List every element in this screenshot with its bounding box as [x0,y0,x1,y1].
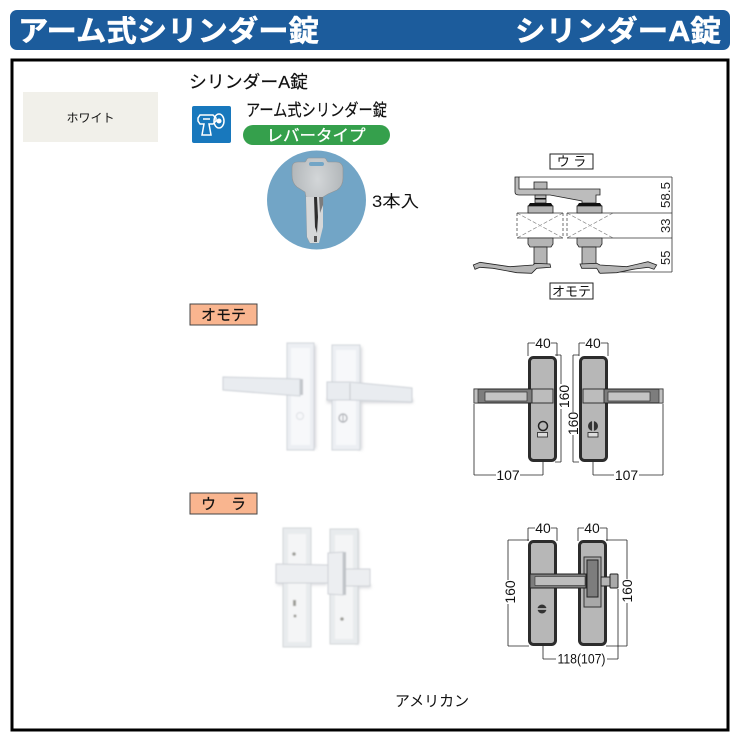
right plate [530,542,618,644]
lever type pill [243,125,390,145]
dimension text: 40 [585,335,601,351]
header bar [10,10,730,50]
left plate [474,358,556,460]
dimension text: 160 [565,412,581,435]
dimension text: 40 [584,520,600,536]
dimension text: 160 [556,385,572,408]
type label: アーム式シリンダー錠 [246,101,387,120]
dimension text: 107 [496,467,520,483]
front escutcheons and levers [473,238,657,273]
33: 33 [658,219,673,233]
dimension text: 160 [502,580,518,604]
lever type pill: レバータイプ [266,127,366,145]
left plate [530,542,556,644]
dimension text [496,335,638,483]
dimension text: 107 [615,467,638,483]
front lever photo [223,343,413,450]
section label: front: オモテ [201,307,246,324]
section label: back [190,493,257,514]
58.5: 58.5 [658,182,673,208]
back latch arm [515,177,600,203]
section label: front [190,304,257,325]
section label: back: ウ ラ [201,496,246,513]
key quantity: 3本入 [372,192,419,211]
label: ura: ウ ラ [557,154,586,169]
colour swatch: white [23,92,158,142]
dimension text [502,520,635,666]
back spindles [528,182,602,213]
colour swatch: white: ホワイト [66,111,115,125]
key image circle [267,150,366,250]
right plate [580,358,663,460]
dimension text: 40 [535,335,551,351]
door sections [517,213,613,238]
label: omote: オモテ [552,284,591,299]
header title right: シリンダーA錠 [515,14,721,48]
dimension lines [474,343,663,475]
icon: arm cylinder key [192,106,231,143]
dimension text: 118(107) [558,650,606,666]
label: ura [550,154,593,169]
front dimension drawing [474,335,663,483]
back dimension drawing [502,520,635,666]
dimension text: 160 [619,579,635,603]
dimension text: 40 [535,520,551,536]
back lever photo [276,528,371,647]
dimension lines [519,177,672,272]
product name: シリンダーA錠 [189,72,308,92]
55: 55 [658,251,673,265]
dimension lines [508,528,627,659]
side section diagram [473,154,673,299]
header title left: アーム式シリンダー錠 [18,14,319,48]
footer caption: アメリカン [395,693,469,710]
